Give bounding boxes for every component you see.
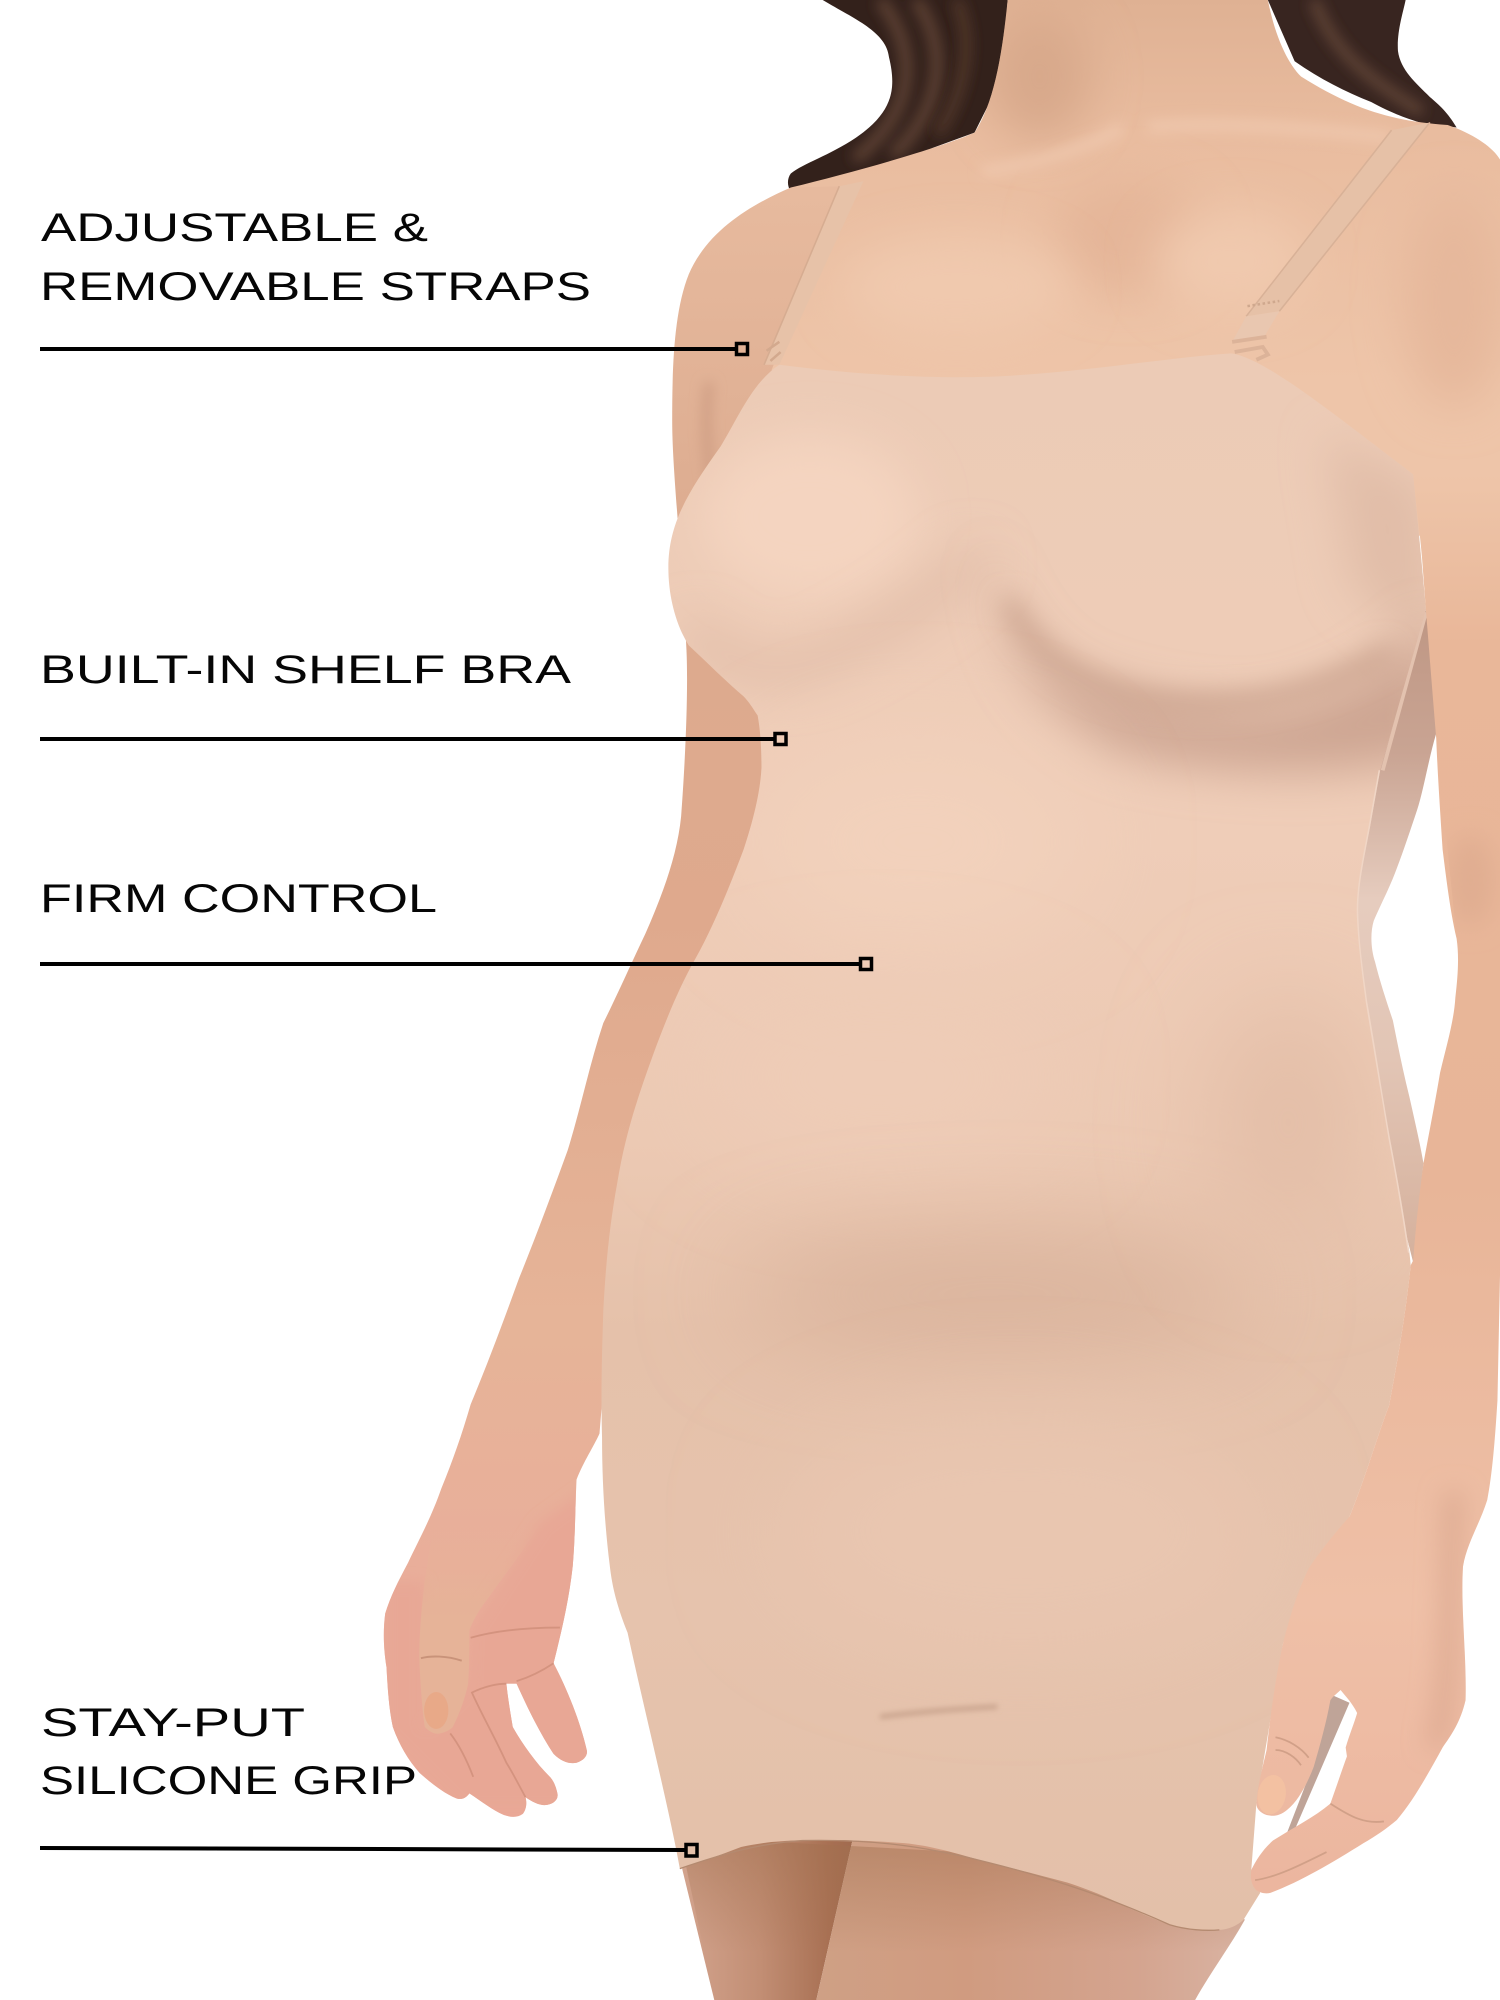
leader line	[40, 344, 748, 354]
label text	[40, 206, 591, 309]
dress back panel	[1352, 610, 1441, 1263]
hand outer shading	[1435, 1492, 1454, 1747]
leader line	[40, 1844, 697, 1856]
waist highlight	[753, 740, 1084, 944]
model figure	[370, 0, 1500, 2000]
hair: left side	[788, 0, 1008, 191]
belly highlight	[702, 989, 1059, 1167]
skirt crease	[880, 1707, 997, 1717]
dress	[602, 353, 1441, 1930]
left underbust tone	[740, 602, 919, 662]
index fingernail	[1254, 1773, 1289, 1817]
right arm and hand	[1251, 474, 1500, 1893]
callout: built-in shelf bra	[40, 648, 786, 744]
label text: STAY-PUT	[41, 1701, 305, 1745]
belly lower shadow	[806, 1228, 1185, 1342]
hem edge	[680, 1840, 1219, 1930]
right breast underbust crescent shadow	[1002, 630, 1420, 790]
finger creases	[450, 1628, 560, 1797]
strap hook	[1232, 337, 1268, 360]
callout: stay-put silicone grip	[40, 1701, 697, 1856]
callout: firm control	[40, 877, 872, 970]
left arm and hand	[384, 188, 814, 1817]
label text: REMOVABLE STRAPS	[40, 265, 591, 309]
finger creases	[1255, 1737, 1384, 1880]
right thigh	[816, 1837, 1245, 2000]
back strap	[1383, 612, 1426, 770]
right shoulder tone	[1414, 245, 1492, 392]
left thigh	[680, 1837, 853, 2000]
hair: right side	[1268, 0, 1457, 128]
leader line	[40, 958, 872, 970]
label text	[40, 1701, 417, 1803]
label text: BUILT-IN SHELF BRA	[40, 648, 571, 692]
left breast highlight	[728, 458, 892, 574]
bodice right side tone	[1340, 460, 1426, 622]
thumb	[419, 1499, 540, 1734]
callout: adjustable and removable straps	[40, 206, 748, 354]
left strap	[764, 181, 864, 365]
neck and chest skin	[765, 0, 1500, 536]
label text: SILICONE GRIP	[40, 1759, 417, 1803]
thighs	[680, 1837, 1245, 2000]
leader line	[40, 734, 786, 744]
label text: FIRM CONTROL	[40, 877, 437, 921]
right strap	[1232, 122, 1430, 360]
palm and fingers shading	[383, 1480, 599, 1811]
gap in hand showing dress back	[1287, 1693, 1349, 1833]
side seam	[1358, 770, 1409, 1253]
hip side tone	[1238, 1037, 1340, 1168]
thumbnail	[424, 1692, 448, 1729]
elbow crease	[1462, 859, 1480, 900]
label text: ADJUSTABLE &	[41, 206, 428, 250]
